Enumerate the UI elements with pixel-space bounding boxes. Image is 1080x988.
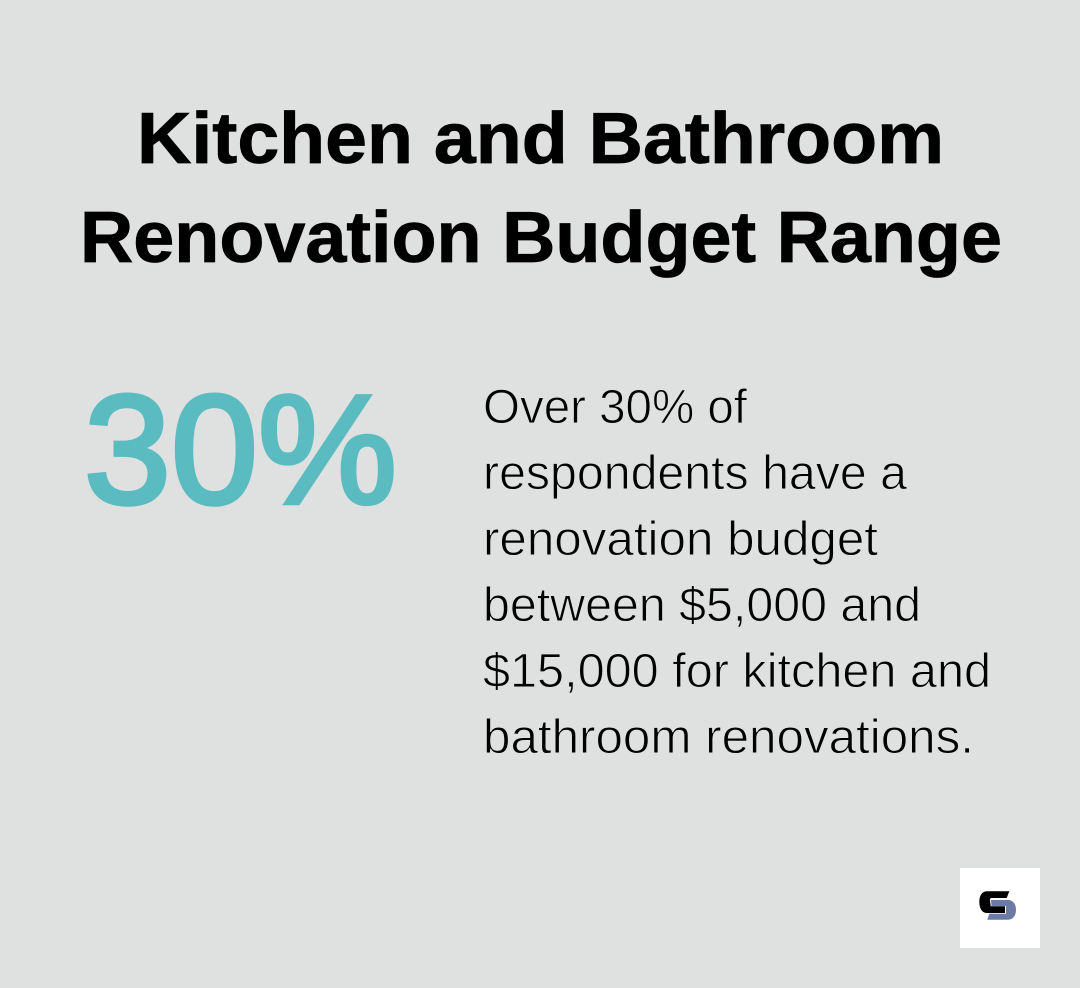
title: Kitchen and Bathroom xyxy=(137,99,944,179)
description text xyxy=(483,381,991,764)
description text: Over 30% of xyxy=(483,381,748,434)
title: Renovation Budget Range xyxy=(80,198,1002,278)
description text: renovation budget xyxy=(483,513,878,566)
logo badge xyxy=(960,868,1040,948)
description text: $15,000 for kitchen and xyxy=(483,645,991,698)
title xyxy=(80,99,1002,278)
description text: respondents have a xyxy=(483,447,907,500)
description text: between $5,000 and xyxy=(483,579,921,632)
big stat: 30%: 30% xyxy=(84,363,397,536)
description text: bathroom renovations. xyxy=(483,711,974,764)
